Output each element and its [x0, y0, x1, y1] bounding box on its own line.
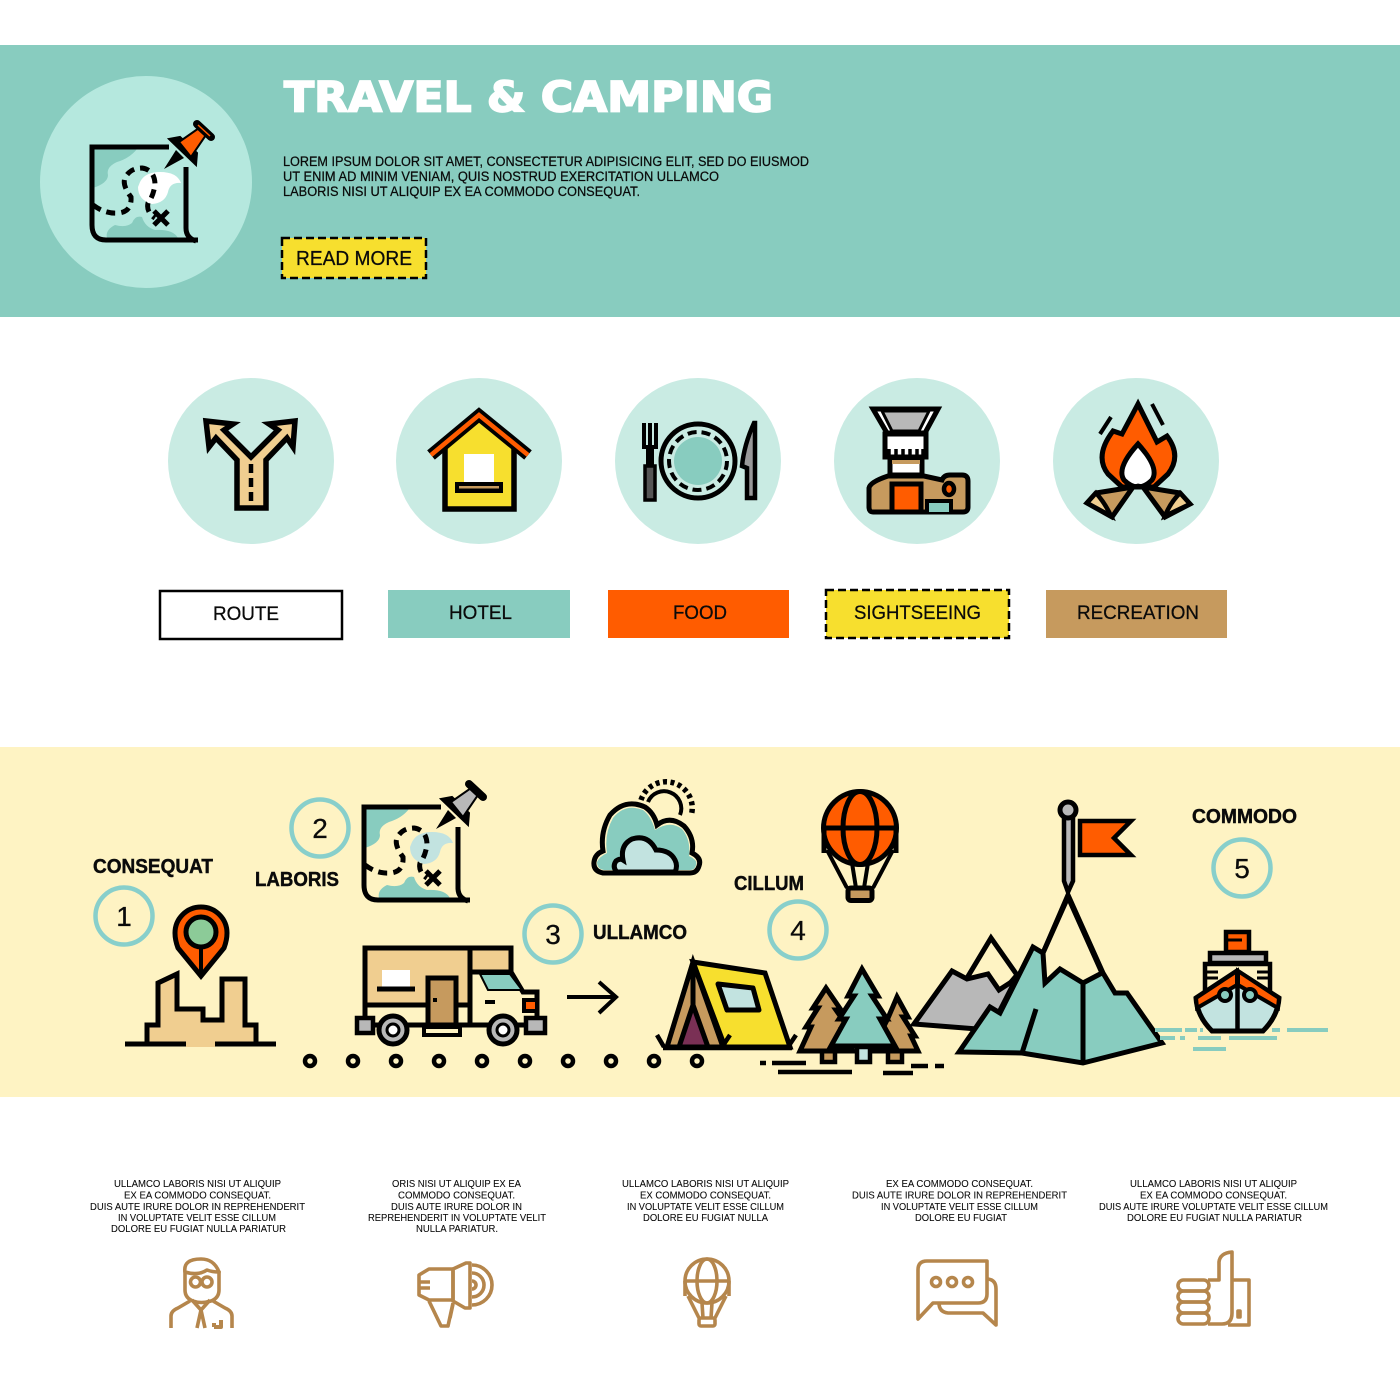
- panel: category icons: [0, 0, 1219, 544]
- text block: column 1 copy: EX EA COMMODO CONSEQUAT.: [124, 1190, 271, 1202]
- icon: hotel house: [0, 0, 562, 544]
- text block: column 3 copy: IN VOLUPTATE VELIT ESSE CILLUM: [627, 1201, 784, 1213]
- text block: column 5 copy: DOLORE EU FUGIAT NULLA PARIATUR: [1127, 1212, 1302, 1224]
- icon: route fork: [168, 378, 334, 544]
- step 3: number badge: 3: [545, 919, 561, 950]
- text block: column 1 copy: DUIS AUTE IRURE DOLOR IN REPREHENDERIT: [90, 1201, 306, 1213]
- panel: bottom column 3: [622, 1178, 789, 1326]
- text block: column 2 copy: REPREHENDERIT IN VOLUPTATE VELIT: [368, 1212, 547, 1224]
- step 1: number badge: 1: [116, 901, 132, 932]
- icon: campfire: [1053, 378, 1219, 544]
- step 4: number badge: 4: [790, 915, 806, 946]
- step 2: number badge: 2: [312, 813, 328, 844]
- panel: hero banner: [0, 45, 1400, 317]
- icon: camera: [834, 378, 1000, 544]
- text block: column 4 copy: [852, 1178, 1068, 1224]
- label: food: [608, 590, 789, 638]
- dotted road: [305, 1056, 702, 1066]
- text block: intro paragraph: [283, 154, 809, 199]
- title: TRAVEL & CAMPING: [284, 72, 773, 122]
- icon: balloon outline: [685, 1259, 729, 1326]
- icon: location marker: [175, 907, 227, 976]
- arrow: [567, 982, 616, 1013]
- panel: bottom column 5: [1099, 1178, 1328, 1325]
- label: route: [160, 591, 342, 639]
- label: route: ROUTE: [213, 604, 279, 625]
- text block: column 5 copy: ULLAMCO LABORIS NISI UT ALIQUIP: [1130, 1178, 1297, 1190]
- button: read more: READ MORE: [296, 248, 412, 270]
- label: sightseeing: [826, 590, 1009, 638]
- label: sightseeing: SIGHTSEEING: [854, 603, 981, 624]
- step 1: number badge: [96, 888, 152, 944]
- text block: column 1 copy: IN VOLUPTATE VELIT ESSE CILLUM: [118, 1212, 276, 1224]
- text block: column 5 copy: DUIS AUTE IRURE VOLUPTATE VELIT ESSE CILLUM: [1099, 1201, 1328, 1213]
- text block: column 4 copy: DOLORE EU FUGIAT: [915, 1212, 1008, 1224]
- text block: column 4 copy: EX EA COMMODO CONSEQUAT.: [886, 1178, 1033, 1190]
- step 3: heading: ULLAMCO: [593, 922, 687, 944]
- text block: column 5 copy: EX EA COMMODO CONSEQUAT.: [1140, 1190, 1287, 1202]
- panel: category labels: [160, 590, 1227, 639]
- step 5: number badge: [1214, 840, 1270, 896]
- icon: mountains with flag: [914, 802, 1162, 1063]
- icon: pine trees: [800, 969, 918, 1062]
- text block: column 1 copy: DOLORE EU FUGIAT NULLA PARIATUR: [111, 1223, 286, 1235]
- text block: column 3 copy: DOLORE EU FUGIAT NULLA: [643, 1212, 768, 1224]
- text block: column 2 copy: NULLA PARIATUR.: [416, 1223, 498, 1235]
- text block: column 3 copy: EX COMMODO CONSEQUAT.: [640, 1190, 771, 1202]
- step 4: number badge: [770, 902, 826, 958]
- step 5: number badge: 5: [1234, 853, 1250, 884]
- button: read more: [282, 238, 426, 278]
- icon: map with grey pin: [364, 784, 483, 901]
- text block: column 4 copy: DUIS AUTE IRURE DOLOR IN REPREHENDERIT: [852, 1190, 1068, 1202]
- text block: column 2 copy: COMMODO CONSEQUAT.: [398, 1190, 515, 1202]
- icon: ship: [1196, 932, 1279, 1031]
- text block: column 1 copy: [90, 1178, 306, 1235]
- water lines: [1155, 1030, 1328, 1049]
- label: food: FOOD: [673, 603, 727, 624]
- icon: tent: [657, 962, 796, 1048]
- panel: bottom column 2: [368, 1178, 547, 1326]
- text block: intro paragraph: LOREM IPSUM DOLOR SIT AMET, CONSECTETUR ADIPISICING ELIT, SED DO EIUSMOD: [283, 154, 809, 169]
- panel: bottom column 1: [90, 1178, 306, 1328]
- text block: column 3 copy: ULLAMCO LABORIS NISI UT ALIQUIP: [622, 1178, 789, 1190]
- icon: plate and cutlery: [615, 378, 781, 544]
- icon: hot air balloon: [824, 792, 896, 900]
- text block: column 2 copy: [368, 1178, 547, 1235]
- step 3: number badge: [524, 906, 582, 962]
- text block: column 4 copy: IN VOLUPTATE VELIT ESSE CILLUM: [881, 1201, 1038, 1213]
- text block: column 2 copy: ORIS NISI UT ALIQUIP EX EA: [392, 1178, 521, 1190]
- text block: column 5 copy: [1099, 1178, 1328, 1224]
- step 4: heading: CILLUM: [734, 873, 804, 895]
- text block: column 1 copy: ULLAMCO LABORIS NISI UT ALIQUIP: [114, 1178, 281, 1190]
- panel: journey band: [0, 747, 1400, 1097]
- step 5: heading: COMMODO: [1192, 806, 1297, 828]
- step 2: number badge: [292, 800, 348, 856]
- icon: megaphone: [419, 1263, 492, 1326]
- text block: column 3 copy: [622, 1178, 789, 1224]
- icon: chat bubbles: [918, 1261, 996, 1325]
- text block: intro paragraph: LABORIS NISI UT ALIQUIP EX EA COMMODO CONSEQUAT.: [283, 184, 640, 199]
- step 1: heading: CONSEQUAT: [93, 856, 213, 878]
- label: recreation: [1046, 590, 1227, 638]
- icon: businessman: [171, 1259, 232, 1328]
- text block: intro paragraph: UT ENIM AD MINIM VENIAM, QUIS NOSTRUD EXERCITATION ULLAMCO: [283, 169, 719, 184]
- label: hotel: [388, 590, 570, 638]
- icon: ruined city: [125, 974, 276, 1047]
- icon: treasure map with orange pin: [40, 76, 252, 288]
- icon: thumbs up: [1178, 1252, 1249, 1325]
- icon: camper truck: [357, 948, 545, 1044]
- label: recreation: RECREATION: [1077, 603, 1199, 624]
- label: hotel: HOTEL: [449, 603, 512, 624]
- step 2: heading: LABORIS: [255, 869, 339, 891]
- text block: column 2 copy: DUIS AUTE IRURE DOLOR IN: [391, 1201, 522, 1213]
- icon: clouds and sun: [594, 782, 700, 873]
- ground dashes: [760, 1063, 944, 1073]
- panel: bottom column 4: [852, 1178, 1068, 1325]
